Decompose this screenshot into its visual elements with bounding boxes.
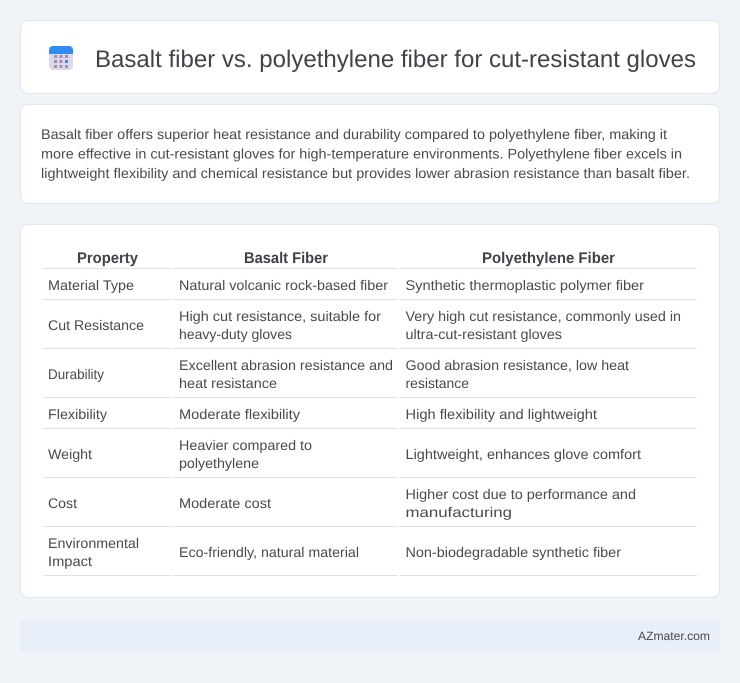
panel: summary [20,104,720,204]
row: weight [43,437,697,478]
row: material type: Synthetic thermoplastic polymer fiber [406,277,644,293]
table header: Property [77,250,138,267]
row: environmental impact: Eco-friendly, natural material [179,544,359,560]
row: environmental impact: Environmental [48,535,139,551]
row: cut resistance: Cut Resistance [48,317,144,333]
footer [20,619,720,653]
row: durability: Excellent abrasion resistance and [179,357,393,373]
footer: AZmater.com [638,629,710,643]
row: cost: manufacturing [406,504,512,520]
row: cut resistance: heavy-duty gloves [179,326,292,342]
row: cut resistance [43,308,697,349]
row: environmental impact: Impact [48,553,92,569]
row: weight: Weight [48,446,92,462]
row: weight: Heavier compared to [179,437,312,453]
row: durability [43,357,697,398]
row: durability: resistance [406,375,469,391]
row: material type: Material Type [48,277,134,293]
panel: title card [20,20,720,94]
row: weight: Lightweight, enhances glove comfort [406,446,641,462]
row: durability: Good abrasion resistance, low heat [406,357,629,373]
table header: Polyethylene Fiber [482,250,615,267]
row: durability: Durability [48,366,104,382]
row: cut resistance: Very high cut resistance, commonly used in [406,308,681,324]
row: flexibility: Flexibility [48,406,107,422]
row: material type [43,277,697,300]
text block: summary paragraph: lightweight flexibility and chemical resistance but provides lower abrasion resistance than basalt fiber. [41,165,690,181]
text block: summary paragraph: more effective in cut-resistant gloves for high-temperature environments. Polyethylene fiber excels in [41,146,682,162]
text block: summary paragraph [41,126,690,181]
row: cut resistance: ultra-cut-resistant gloves [406,326,562,342]
row: environmental impact: Non-biodegradable synthetic fiber [406,544,621,560]
title: Basalt fiber vs. polyethylene fiber for cut-resistant gloves [95,46,696,73]
row: durability: heat resistance [179,375,277,391]
panel: comparison table [20,224,720,598]
text block: summary paragraph: Basalt fiber offers superior heat resistance and durability compared to polyethylene fiber, making it [41,126,667,142]
row: flexibility: Moderate flexibility [179,406,300,422]
row: flexibility: High flexibility and lightweight [406,406,597,422]
icon: calendar [49,46,73,70]
row: cut resistance: High cut resistance, suitable for [179,308,381,324]
row: weight: polyethylene [179,455,259,471]
table header [43,250,697,269]
row: material type: Natural volcanic rock-based fiber [179,277,388,293]
row: cost: Cost [48,495,77,511]
row: cost: Moderate cost [179,495,271,511]
row: cost: Higher cost due to performance and [406,486,636,502]
row: cost [43,486,697,527]
row: flexibility [43,406,697,429]
row: environmental impact [43,535,697,576]
table header: Basalt Fiber [244,250,328,267]
